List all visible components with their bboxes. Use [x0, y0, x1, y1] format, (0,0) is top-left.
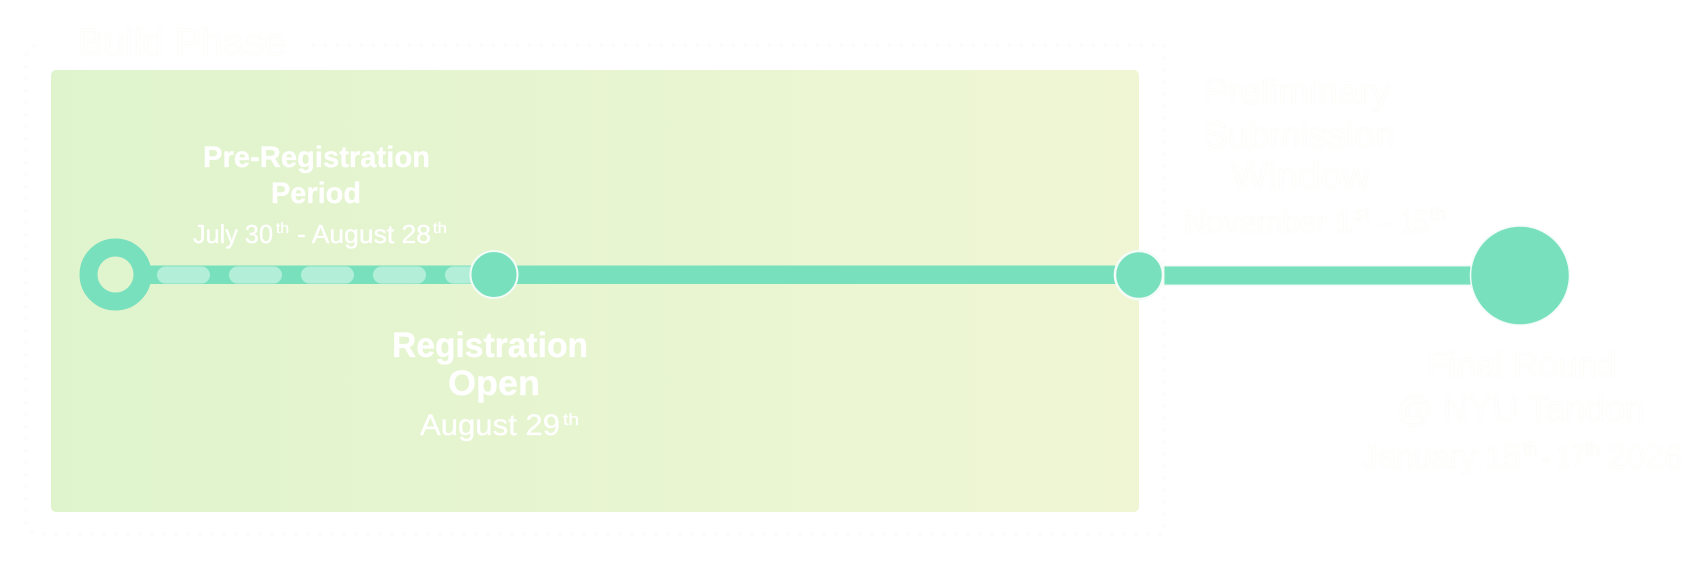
label: pre-registration period: Pre-Registration	[203, 141, 430, 174]
label: preliminary submission window: Preliminary	[1203, 71, 1390, 112]
label: registration open: th	[563, 410, 579, 429]
label: registration open	[392, 326, 588, 442]
label: preliminary submission window: November 1	[1184, 204, 1353, 240]
panel: build phase background	[51, 70, 1139, 512]
start marker ring	[88, 248, 142, 302]
preliminary submission marker	[1115, 251, 1163, 299]
timeline track	[140, 266, 1474, 285]
label: registration open: Open	[448, 364, 540, 403]
label: preliminary submission window: th	[1430, 204, 1446, 224]
label: final round at NYU Tandon	[1362, 344, 1683, 475]
label: pre-registration period: - August 28	[297, 219, 431, 249]
label: final round at NYU Tandon: @ NYU Tandon	[1396, 388, 1645, 429]
label: final round at NYU Tandon: 2026	[1607, 438, 1683, 475]
label: pre-registration period: Period	[271, 177, 361, 210]
label: preliminary submission window: – 15	[1380, 204, 1428, 240]
label: registration open: August 29	[420, 409, 560, 442]
label: final round at NYU Tandon: th	[1585, 439, 1600, 459]
label: final round at NYU Tandon: January 15	[1362, 438, 1521, 475]
label: final round at NYU Tandon: - 17	[1541, 438, 1585, 475]
label: final round at NYU Tandon: th	[1523, 439, 1538, 459]
label: pre-registration period: th	[276, 220, 289, 237]
label: preliminary submission window: Submission	[1203, 114, 1396, 155]
label: preliminary submission window: st	[1355, 204, 1370, 224]
heading: Build Phase: Build Phase	[77, 22, 286, 64]
label: final round at NYU Tandon: Final Round	[1427, 344, 1617, 385]
label: pre-registration period	[193, 141, 447, 249]
label: registration open: Registration	[392, 326, 588, 365]
pre-registration dashed overlay	[157, 266, 493, 284]
registration open marker	[470, 251, 518, 298]
final round marker	[1470, 226, 1570, 325]
label: pre-registration period: th	[433, 220, 447, 237]
label: preliminary submission window	[1184, 71, 1446, 240]
label: preliminary submission window: Window	[1231, 155, 1371, 196]
label: pre-registration period: July 30	[193, 219, 273, 249]
